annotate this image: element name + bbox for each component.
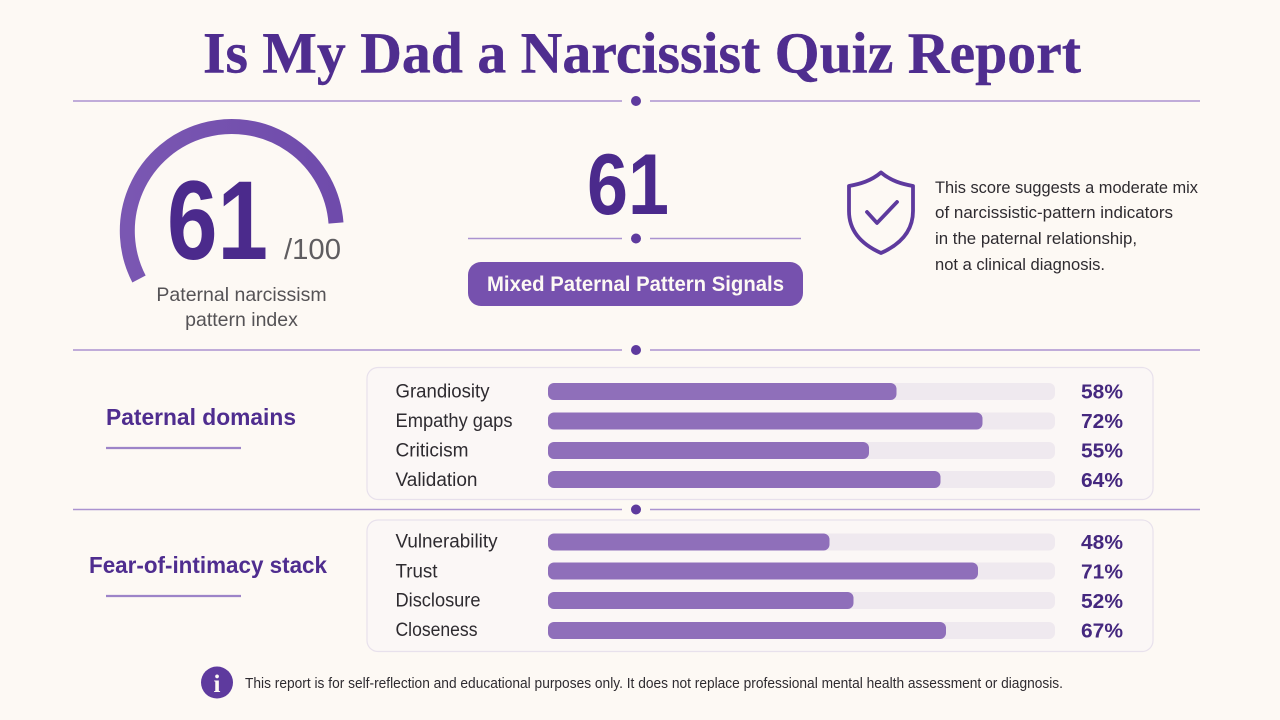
score explanation: in the paternal relationship, [935, 229, 1137, 248]
gauge score: 61 [167, 158, 268, 283]
bar: trust 71%: 71% [1081, 560, 1123, 584]
bar: criticism 55%: 55% [1081, 440, 1123, 462]
bar: empathy gaps 72% [396, 410, 1123, 433]
heading: paternal domains: Paternal domains [106, 404, 296, 430]
bar: empathy gaps 72%: Empathy gaps [396, 411, 512, 432]
bar: validation 64%: Validation [396, 470, 478, 491]
bar: grandiosity 58% [396, 380, 1123, 404]
icon: info [201, 666, 233, 698]
bar: trust 71%: Trust [396, 562, 438, 582]
bar: criticism 55% [396, 440, 1123, 462]
score explanation: not a clinical diagnosis. [935, 255, 1105, 274]
score badge: Mixed Paternal Pattern Signals [487, 273, 784, 296]
gauge arc [127, 126, 336, 279]
gauge caption [156, 284, 327, 331]
bar: disclosure 52%: Disclosure [396, 590, 480, 612]
bar: closeness 67%: 67% [1081, 620, 1123, 642]
score number: 61 [587, 137, 669, 233]
heading: fear-of-intimacy stack: Fear-of-intimacy stack [89, 552, 327, 578]
central score [468, 137, 803, 306]
bar: grandiosity 58%: Grandiosity [396, 382, 490, 402]
panel: paternal domains [367, 368, 1153, 500]
bar: closeness 67% [396, 620, 1123, 642]
title: Is My Dad a Narcissist Quiz Report [203, 20, 1082, 86]
bar: criticism 55%: Criticism [396, 440, 468, 462]
bar: validation 64%: 64% [1081, 469, 1123, 492]
bar: vulnerability 48%: 48% [1081, 531, 1123, 554]
disclaimer: This report is for self-reflection and educational purposes only. It does not replace professional mental health assessment or diagnosis. [245, 676, 1063, 692]
score explanation: This score suggests a moderate mix [935, 178, 1198, 197]
score explanation [935, 178, 1198, 274]
score badge [468, 262, 803, 306]
bar: vulnerability 48% [396, 531, 1123, 554]
gauge: pattern index [127, 126, 341, 331]
bar: validation 64% [396, 469, 1123, 492]
bar: closeness 67%: Closeness [396, 620, 478, 641]
bar: disclosure 52% [396, 590, 1123, 613]
bar: grandiosity 58%: 58% [1081, 380, 1123, 404]
score explanation: of narcissistic-pattern indicators [935, 203, 1173, 222]
gauge caption: Paternal narcissism [156, 284, 327, 306]
bar: trust 71% [396, 560, 1123, 584]
icon: info: i [214, 671, 221, 698]
bar: empathy gaps 72%: 72% [1081, 410, 1123, 433]
icon: shield with check [849, 172, 913, 253]
gauge caption: pattern index [185, 309, 298, 331]
bar: disclosure 52%: 52% [1081, 590, 1123, 613]
panel: fear-of-intimacy stack [367, 520, 1153, 652]
gauge maximum: /100 [284, 234, 341, 266]
bar: vulnerability 48%: Vulnerability [396, 532, 498, 552]
